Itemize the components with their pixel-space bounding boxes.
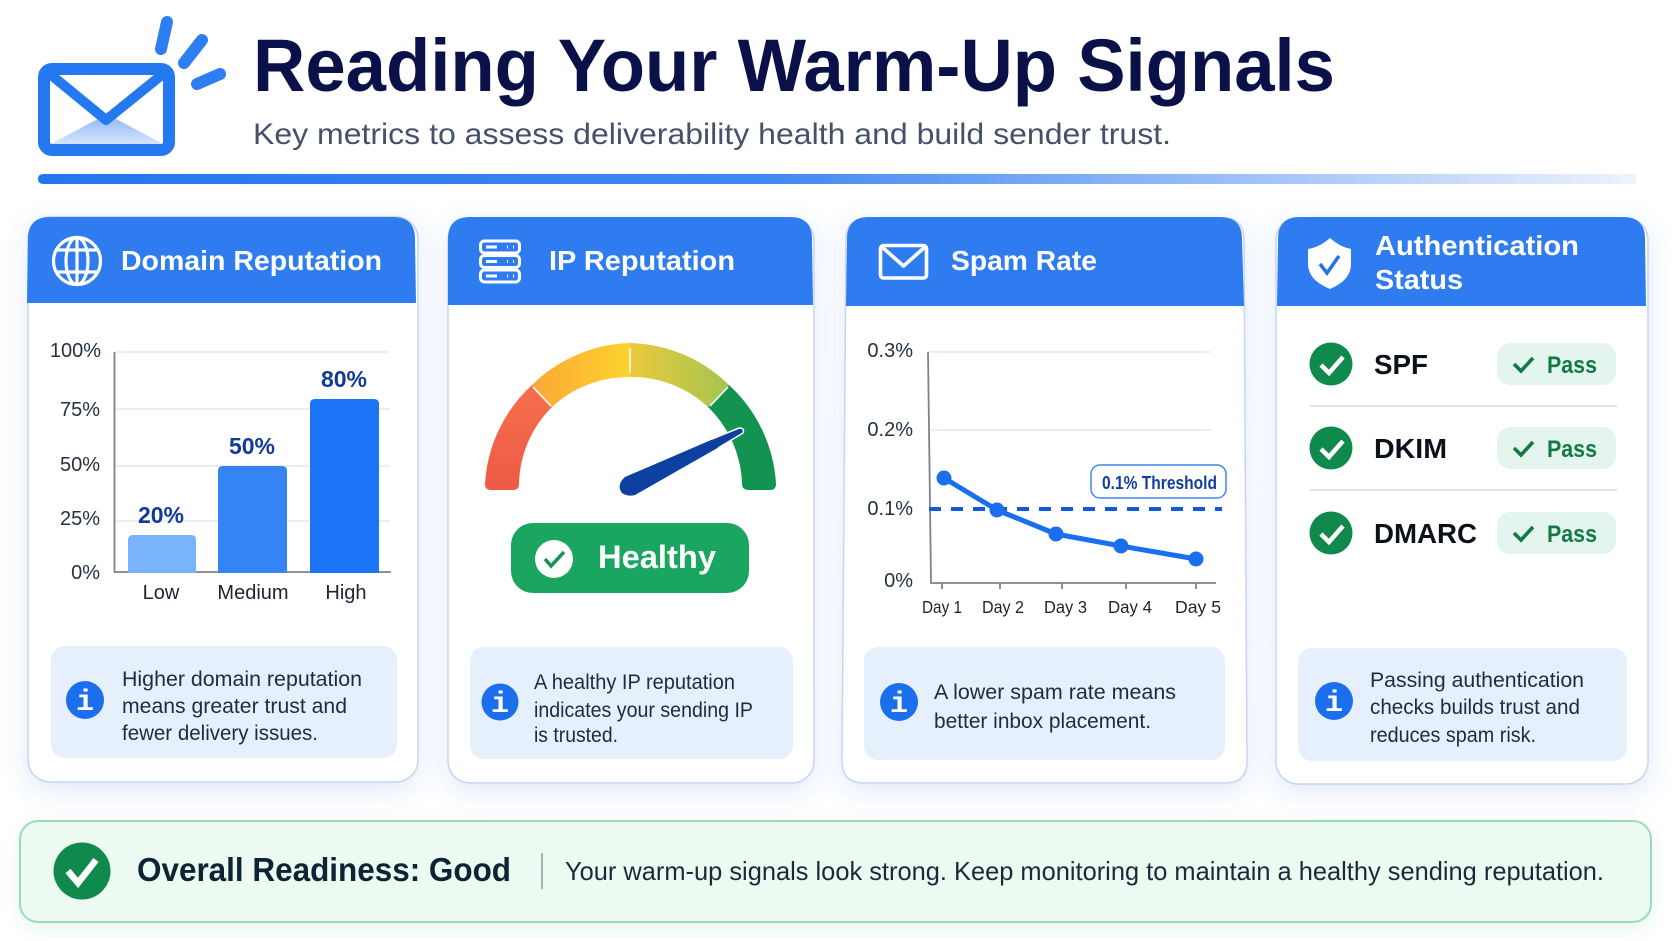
callout: authentication note: i <box>1325 687 1343 721</box>
panel: domain reputation <box>27 217 418 782</box>
banner: overall readiness: Your warm-up signals look strong. Keep monitoring to maintain a healthy sending reputation. <box>565 856 1604 886</box>
row: SPF: SPF <box>1374 349 1428 380</box>
bar chart: reputation levels: 50% <box>60 454 100 476</box>
status badge: healthy <box>511 523 749 593</box>
line chart: spam rate by day: 0.1% <box>867 498 913 520</box>
bar chart: reputation levels: High <box>325 582 367 604</box>
bar chart: reputation levels: 80% <box>321 366 367 392</box>
line chart: spam rate by day: Day 1 <box>922 597 962 617</box>
callout: authentication note: reduces spam risk. <box>1370 724 1536 747</box>
panel header: spam rate <box>846 217 1244 306</box>
row: DKIM: DKIM <box>1374 433 1447 464</box>
line chart: spam rate by day: Day 4 <box>1108 597 1152 617</box>
banner: overall readiness: Overall Readiness: Good <box>137 851 511 888</box>
bar chart: reputation levels: 75% <box>60 399 100 421</box>
callout: IP reputation note <box>470 647 793 759</box>
line chart: spam rate by day: Day 2 <box>982 597 1024 617</box>
bar chart: reputation levels: 50% <box>229 433 275 459</box>
row: SPF: Pass <box>1547 352 1597 379</box>
callout: domain reputation note <box>51 646 397 758</box>
banner: overall readiness <box>20 821 1651 922</box>
panel header: spam rate: Spam Rate <box>951 245 1097 276</box>
threshold label <box>1091 465 1226 498</box>
callout: authentication note <box>1298 648 1627 761</box>
icon: readiness check <box>54 842 110 900</box>
callout: spam rate note <box>864 647 1225 760</box>
line chart: spam rate by day: 0% <box>884 570 913 592</box>
bar chart: reputation levels: Medium <box>217 582 289 604</box>
gauge needle <box>620 428 744 496</box>
callout: IP reputation note: is trusted. <box>534 724 618 747</box>
callout: spam rate note: A lower spam rate means <box>934 681 1176 704</box>
icon: envelope with signal rays <box>44 22 220 150</box>
bar chart: reputation levels: 25% <box>60 508 100 530</box>
callout: IP reputation note: i <box>491 688 509 722</box>
line chart: spam rate by day: Day 5 <box>1175 597 1221 617</box>
icon: globe <box>54 238 100 284</box>
header rule <box>38 174 1636 184</box>
line chart: spam rate by day <box>867 340 1226 617</box>
callout: domain reputation note: fewer delivery issues. <box>122 722 318 745</box>
icon: shield check <box>1308 238 1351 289</box>
callout: IP reputation note: A healthy IP reputation <box>534 671 735 694</box>
line chart: spam rate by day: 0.2% <box>867 419 913 441</box>
row: DKIM: Pass <box>1547 436 1597 463</box>
row: DKIM <box>1310 426 1616 470</box>
callout: spam rate note: i <box>890 688 908 722</box>
callout: IP reputation note: indicates your sending IP <box>534 699 753 722</box>
threshold label: 0.1% Threshold <box>1102 473 1217 493</box>
callout: authentication note: Passing authentication <box>1370 669 1584 692</box>
gauge: IP reputation score <box>485 343 776 496</box>
subtitle: Key metrics to assess deliverability health and build sender trust. <box>253 118 1171 151</box>
bar chart: reputation levels <box>50 340 391 604</box>
status badge: healthy: Healthy <box>598 539 716 575</box>
row: SPF <box>1310 342 1616 386</box>
line chart: spam rate by day: 0.3% <box>867 340 913 362</box>
row: DMARC: DMARC <box>1374 518 1477 549</box>
callout: spam rate note: better inbox placement. <box>934 710 1151 733</box>
bar chart: reputation levels: 100% <box>50 340 101 362</box>
panel header: authentication status: Status <box>1375 264 1463 295</box>
row: DMARC: Pass <box>1547 521 1597 548</box>
panel header: domain reputation <box>27 217 416 303</box>
row: DMARC <box>1310 512 1616 554</box>
bar chart: reputation levels: 0% <box>71 562 100 584</box>
callout: domain reputation note: i <box>76 686 94 720</box>
panel: authentication status <box>1276 217 1648 784</box>
panel header: IP reputation <box>448 217 813 305</box>
panel header: authentication status: Authentication <box>1375 230 1579 261</box>
bar chart: reputation levels: Low <box>143 582 180 604</box>
callout: domain reputation note: Higher domain reputation <box>122 668 362 691</box>
panel header: domain reputation: Domain Reputation <box>121 245 382 276</box>
panel header: IP reputation: IP Reputation <box>549 245 735 276</box>
title: Reading Your Warm-Up Signals <box>253 24 1335 107</box>
callout: authentication note: checks builds trust and <box>1370 696 1580 719</box>
icon: server stack <box>480 241 520 282</box>
panel header: authentication status <box>1277 217 1646 306</box>
icon: envelope <box>880 246 926 278</box>
panel: spam rate <box>842 217 1247 783</box>
callout: domain reputation note: means greater trust and <box>122 695 347 718</box>
bar chart: reputation levels: 20% <box>138 502 184 528</box>
line chart: spam rate by day: Day 3 <box>1044 597 1087 617</box>
panel: IP reputation <box>448 217 814 783</box>
